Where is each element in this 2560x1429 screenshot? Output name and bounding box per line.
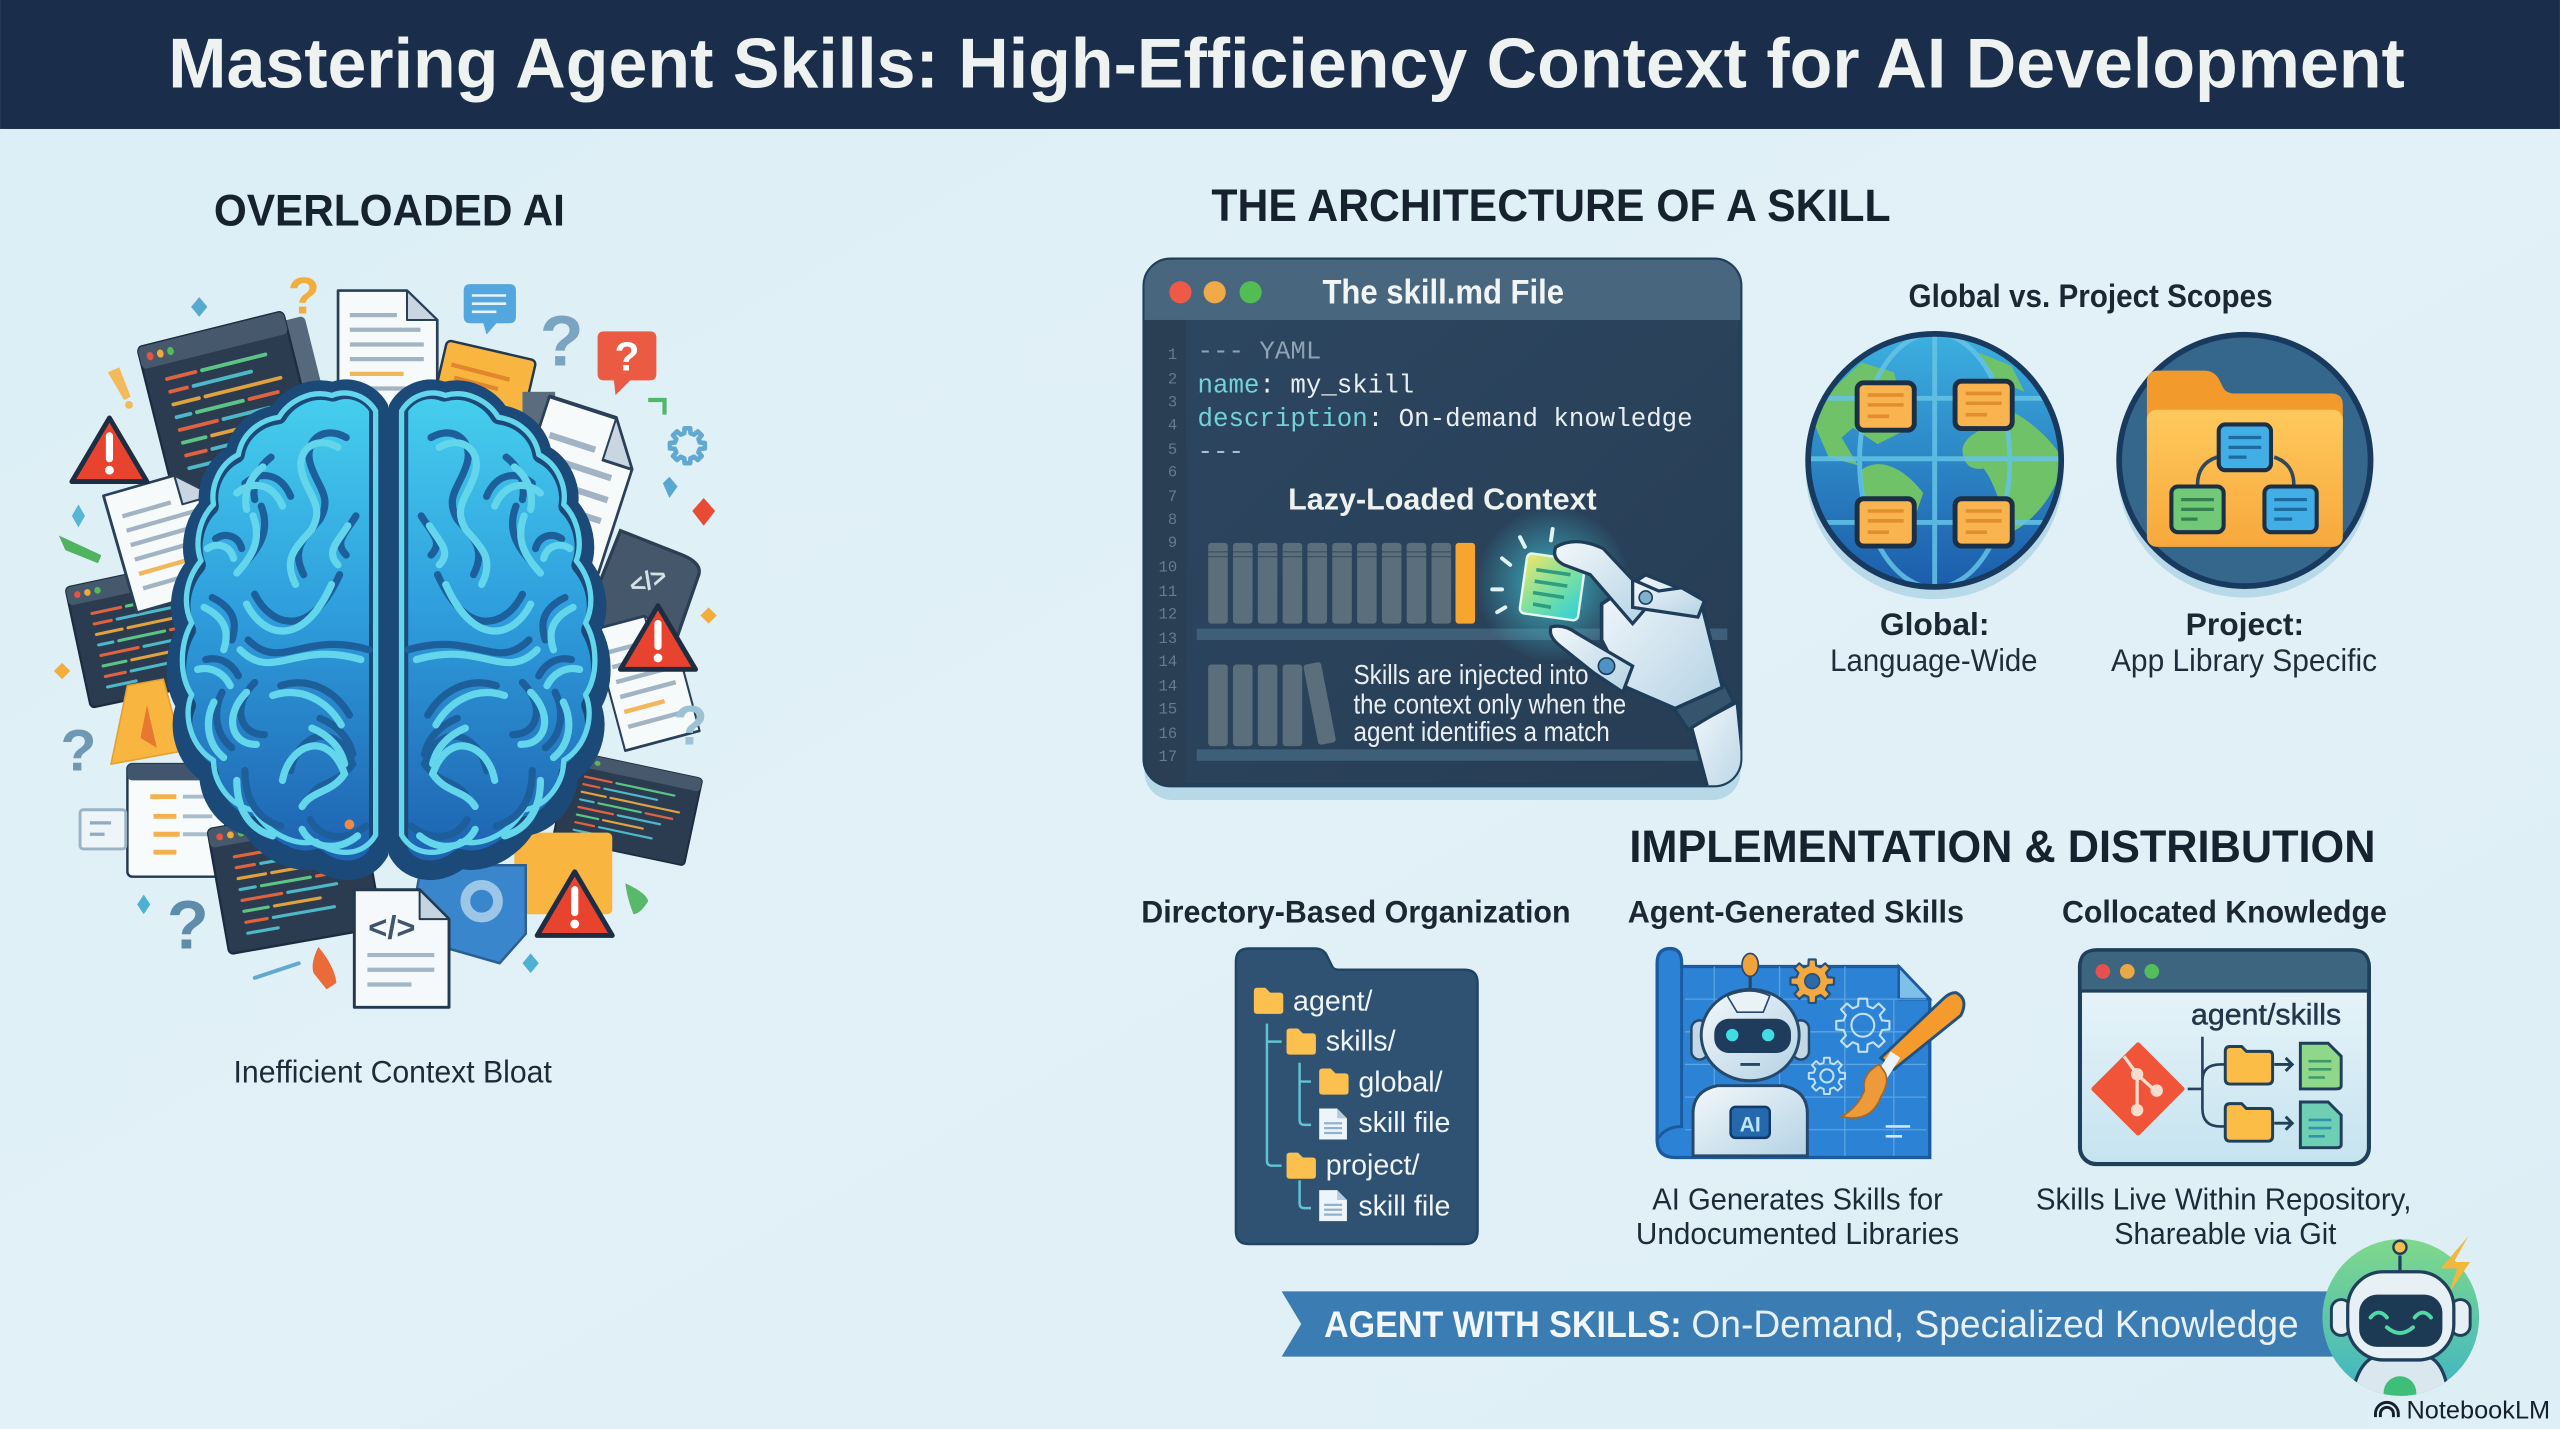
text: skills injected explanation: agent identifies a match: [1353, 716, 1610, 747]
icon: robot painting a blueprint: [1657, 949, 1964, 1158]
YAML code: [1199, 342, 1691, 453]
text: skills injected explanation: [1353, 659, 1626, 747]
line number gutter: 15: [1159, 700, 1177, 718]
title bar: The skill.md File: [1322, 274, 1564, 312]
line number gutter: 6: [1168, 464, 1177, 482]
caption: skills live within repository: Skills Live Within Repository,: [2036, 1184, 2411, 1217]
illustration: overloaded brain surrounded by clutter: [54, 267, 717, 1007]
panel: agent-generated skills: [1628, 893, 1964, 1251]
watermark: NotebookLM: NotebookLM: [2406, 1397, 2550, 1425]
YAML code: --- YAML: [1198, 337, 1321, 366]
icon: speech bubbles: [464, 284, 656, 395]
line number gutter: 10: [1159, 558, 1177, 576]
line number gutter: 14: [1159, 678, 1177, 696]
line number gutter: 7: [1168, 488, 1177, 506]
line number gutter: 16: [1159, 725, 1177, 743]
subheading: lazy-loaded context: Lazy-Loaded Context: [1288, 483, 1597, 516]
title banner: Mastering Agent Skills: High-Efficiency Context for AI Development: [168, 23, 2405, 102]
icon: speech bubbles: ?: [615, 334, 639, 380]
watermark: NotebookLM: [2367, 1397, 2560, 1429]
line number gutter: 17: [1159, 748, 1177, 766]
label: global: Language-Wide: [1830, 642, 2038, 678]
icon: directory tree folder: skill file: [1358, 1107, 1450, 1139]
clutter: documents and code windows: [65, 291, 702, 963]
bookshelf: lower: [1197, 662, 1740, 761]
icon: small sparkles and shapes: [54, 297, 717, 989]
caption: AI generates skills: Undocumented Libraries: [1636, 1218, 1959, 1251]
caption: AI generates skills: AI Generates Skills for: [1652, 1184, 1943, 1217]
subheading: collocated knowledge: Collocated Knowledge: [2062, 893, 2387, 929]
YAML code: name: my_skill: [1198, 372, 1414, 401]
text: skills injected explanation: the context only when the: [1353, 688, 1626, 719]
icon: question marks: ?: [540, 302, 584, 382]
icon: directory tree folder: skills/: [1326, 1026, 1396, 1058]
line number gutter: 1: [1168, 346, 1177, 364]
caption: inefficient context bloat: Inefficient Context Bloat: [234, 1054, 552, 1089]
label: project: Project:: [2186, 606, 2304, 642]
icon: front code document: [354, 890, 449, 1007]
icon: directory tree folder: project/: [1326, 1150, 1419, 1182]
banner: agent with skills: On-Demand, Specialized Knowledge: [1691, 1303, 2299, 1345]
line number gutter: 5: [1168, 441, 1177, 459]
icon: question marks: [60, 267, 708, 964]
label: project: [2111, 606, 2377, 678]
YAML code: description: On-demand knowledge: [1198, 405, 1693, 434]
icon: robot hand holding skill card: [1480, 512, 1740, 786]
banner: agent with skills: AGENT WITH SKILLS:: [1324, 1304, 1682, 1345]
banner: agent with skills: [1282, 1291, 2351, 1357]
bookshelf: upper: [1197, 543, 1727, 640]
icon: repository window: agent/skills: [2191, 998, 2341, 1031]
line number gutter: [1144, 320, 1186, 787]
icon: front code document: </>: [368, 909, 415, 946]
icon: directory tree folder: agent/: [1293, 986, 1373, 1018]
title bar: [1144, 260, 1740, 320]
text: skills injected explanation: Skills are injected into: [1353, 659, 1589, 690]
icon: brain: [176, 389, 601, 870]
icon: directory tree folder: [1236, 949, 1478, 1244]
heading: global vs project scopes: Global vs. Project Scopes: [1909, 277, 2273, 314]
line number gutter: 11: [1159, 583, 1177, 601]
line number gutter: 4: [1168, 416, 1177, 434]
icon: warning triangles: [72, 418, 696, 935]
YAML code: ---: [1198, 438, 1244, 467]
icon: repository window: [2080, 950, 2369, 1164]
icon: happy robot badge: [2322, 1236, 2479, 1409]
icon: project folder: [2118, 335, 2372, 598]
caption: AI generates skills: [1636, 1184, 1959, 1251]
label: global: Global:: [1880, 606, 1989, 642]
panel: directory-based organization: [1141, 893, 1571, 1244]
window frame: [1144, 260, 1740, 785]
icon: robot painting a blueprint: AI: [1740, 1113, 1761, 1136]
icon: directory tree folder: skill file: [1358, 1190, 1450, 1222]
subheading: agent-generated skills: Agent-Generated Skills: [1628, 893, 1964, 929]
panel: scopes: [1806, 277, 2377, 678]
label: global: [1830, 606, 2038, 678]
heading: implementation and distribution: IMPLEMENTATION & DISTRIBUTION: [1629, 821, 2375, 872]
line number gutter: 13: [1159, 630, 1177, 648]
caption: skills live within repository: [2036, 1184, 2411, 1251]
panel: collocated knowledge: [2036, 893, 2411, 1251]
label: project: App Library Specific: [2111, 642, 2377, 678]
heading: architecture of a skill: THE ARCHITECTURE OF A SKILL: [1211, 180, 1891, 231]
heading: overloaded AI: OVERLOADED AI: [214, 186, 565, 235]
line number gutter: 2: [1168, 371, 1177, 389]
line number gutter: 3: [1168, 394, 1177, 412]
panel: skill.md file window: [1144, 260, 1747, 800]
line number gutter: 8: [1168, 511, 1177, 529]
icon: question marks: ?: [60, 719, 96, 784]
panel: overloaded AI: [54, 186, 717, 1089]
icon: directory tree folder: global/: [1358, 1066, 1443, 1098]
title banner: [0, 0, 2560, 129]
subheading: directory-based organization: Directory-Based Organization: [1141, 893, 1571, 929]
icon: question marks: ?: [288, 267, 320, 325]
caption: skills live within repository: Shareable via Git: [2114, 1218, 2337, 1251]
clutter: documents and code windows: </>: [625, 560, 671, 601]
icon: question marks: ?: [674, 694, 708, 756]
line number gutter: 9: [1168, 534, 1177, 552]
line number gutter: 14: [1159, 653, 1177, 671]
icon: question marks: ?: [167, 887, 209, 964]
line number gutter: 12: [1159, 606, 1177, 624]
icon: globe with skill notes: [1806, 333, 2064, 599]
